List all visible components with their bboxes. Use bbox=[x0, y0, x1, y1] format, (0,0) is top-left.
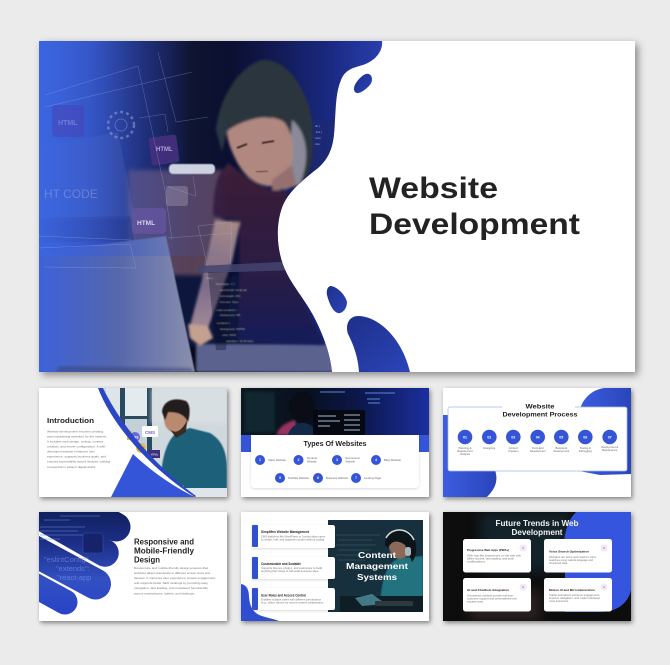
card: progressive web apps: Progressive Web Apps (PWAs) bbox=[467, 548, 509, 552]
dark photo backdrop bbox=[470, 512, 570, 621]
card: motion ui: improve navigation, and make interfaces bbox=[549, 596, 601, 600]
title: Website bbox=[369, 172, 498, 205]
card: voice search optimization: 2 bbox=[603, 546, 605, 550]
hero photo: developer at laptop: div { bbox=[315, 124, 320, 128]
body text: it essential in today's digital world. bbox=[47, 465, 96, 469]
blue blob top right bbox=[579, 388, 631, 475]
body text: It includes web design, coding, content bbox=[47, 440, 103, 444]
code overlay panel: color: #444; bbox=[222, 333, 237, 337]
white card: 5 bbox=[279, 476, 281, 480]
code overlay panel: line-height: 1.7; bbox=[216, 282, 235, 286]
process card bbox=[448, 404, 627, 471]
card: user roles and access control: Enables multiple users with different permissions bbox=[261, 598, 322, 602]
card: motion ui: more interactive. bbox=[549, 599, 569, 603]
card: voice search optimization bbox=[544, 539, 612, 572]
card: voice search optimization: searches using natural language and bbox=[549, 558, 594, 562]
heading: Design bbox=[134, 555, 160, 564]
body text: ensures accessibility across devices, making bbox=[47, 460, 110, 464]
title bbox=[369, 172, 580, 241]
heading bbox=[496, 519, 579, 537]
code overlay panel: background: #fff; bbox=[220, 313, 241, 317]
tech badges: HTML bbox=[151, 452, 159, 456]
floating HTML badges: HTML bbox=[137, 220, 155, 227]
card: progressive web apps: notifications. bbox=[467, 560, 486, 564]
card: customizable and scalable: Supports themes, plugins, and extensions to build bbox=[261, 566, 323, 570]
floating HTML badges: HTML bbox=[58, 120, 78, 127]
process card: Front-End bbox=[532, 446, 544, 450]
code overlay panel: font-size: 16px; bbox=[220, 300, 239, 304]
card: motion ui: Subtle animations enhance engagement, bbox=[549, 593, 600, 597]
body text: across smartphones, tablets, and desktops. bbox=[134, 592, 195, 596]
process card: Requirement bbox=[457, 449, 473, 453]
heading: Future Trends in Web bbox=[496, 519, 579, 528]
process card: Back-End bbox=[555, 446, 568, 450]
heading: Types Of Websites bbox=[304, 441, 367, 448]
panel: introduction slide bbox=[39, 388, 227, 497]
hero photo: developer at laptop: .font { bbox=[315, 130, 322, 134]
process card: Debugging bbox=[579, 449, 592, 453]
floating HTML badges bbox=[52, 105, 180, 234]
process card: Testing & bbox=[580, 446, 591, 450]
card: ai and chatbots: AI and Chatbots Integration bbox=[467, 588, 509, 592]
code overlay panel: font-weight: 300; bbox=[220, 294, 241, 298]
heading: Mobile-Friendly bbox=[134, 546, 195, 555]
diagonal code-photo stripes: "eslintConfig" bbox=[44, 555, 89, 564]
process card: 02 bbox=[487, 436, 491, 440]
card: customizable and scalable bbox=[252, 557, 335, 579]
card: ai and chatbots: 3 bbox=[522, 585, 524, 589]
heading: Introduction bbox=[47, 416, 94, 425]
card: progressive web apps: Offer app-like experiences on the web with bbox=[467, 554, 522, 558]
white card: Website bbox=[346, 460, 356, 464]
gear icon bbox=[108, 112, 134, 138]
code overlay panel: background: #f4f4f4; bbox=[220, 327, 246, 331]
blob accent top bbox=[354, 74, 372, 93]
card: user roles and access control: (e.g., editor, admin) for secure content collaboration. bbox=[261, 600, 324, 604]
blob accent middle bbox=[327, 286, 347, 313]
tech badges bbox=[127, 426, 160, 458]
hero photo: developer at laptop: color; bbox=[315, 136, 322, 140]
panel: content management systems slide bbox=[241, 512, 429, 621]
body text: devices. It improves user experience, boosts engagement, bbox=[134, 576, 216, 580]
blob accent bottom bbox=[347, 316, 410, 372]
photo: smiling developer bbox=[98, 388, 227, 497]
floating HTML badges: HTML bbox=[156, 147, 173, 153]
white card: Portfolio Website bbox=[288, 476, 310, 480]
body text: and maintaining websites for the internet. bbox=[47, 434, 107, 438]
process card: Development bbox=[530, 449, 546, 453]
photo title: Systems bbox=[357, 572, 397, 582]
process card: Deployment & bbox=[601, 445, 618, 449]
card: ai and chatbots: AI-powered chatbots provide real-time bbox=[467, 594, 514, 598]
process card: Development bbox=[553, 449, 569, 453]
white card: Blog Website bbox=[384, 458, 402, 462]
white card bbox=[251, 435, 419, 488]
white card: Landing Page bbox=[364, 476, 382, 480]
code overlay panel: .container { bbox=[216, 321, 230, 325]
heading: Website bbox=[526, 404, 555, 410]
panel: future trends slide bbox=[443, 512, 631, 621]
body text: websites adapt seamlessly to different screen sizes and bbox=[134, 571, 210, 575]
diagonal code-photo stripes bbox=[39, 512, 130, 614]
translucent browser window bbox=[110, 132, 133, 218]
card: progressive web apps: 1 bbox=[522, 546, 524, 550]
code overlay panel bbox=[198, 262, 286, 350]
card: simplifies website management: to create, edit, and organize content without coding. bbox=[261, 538, 325, 542]
code overlay panel: .box { bbox=[206, 276, 213, 280]
blue blob bottom left bbox=[443, 415, 496, 497]
photo: developer at monitor bbox=[241, 388, 429, 435]
panel: development process slide bbox=[443, 388, 631, 497]
heading: Development bbox=[512, 528, 563, 537]
card: ai and chatbots: customer support and personalized user bbox=[467, 596, 517, 600]
process card: 06 bbox=[583, 436, 587, 440]
card: simplifies website management bbox=[252, 525, 335, 548]
card: simplifies website management: CMS platforms like WordPress or Joomla allow users bbox=[261, 534, 326, 538]
card: customizable and scalable: anything from blogs to full-scale business sites. bbox=[261, 569, 319, 573]
heading: Development Process bbox=[502, 412, 578, 418]
hero photo: developer at laptop: size; bbox=[315, 142, 321, 146]
search tile bbox=[166, 186, 188, 206]
white card: Static Website bbox=[268, 458, 287, 462]
photo: woman with headphones bbox=[328, 520, 423, 612]
process card: Creation bbox=[508, 449, 519, 453]
circuit lines bbox=[39, 52, 233, 276]
white card: Website bbox=[307, 460, 317, 464]
white card: 4 bbox=[375, 458, 377, 462]
laptop bbox=[39, 236, 195, 372]
body text: developed website enhances user bbox=[47, 450, 95, 454]
card: simplifies website management: Simplifies Website Management bbox=[261, 530, 310, 534]
white card: Business Website bbox=[326, 476, 349, 480]
hero photo: developer at laptop bbox=[39, 41, 384, 372]
white card: 2 bbox=[298, 458, 300, 462]
process card: Designing bbox=[483, 446, 496, 450]
process card: 05 bbox=[559, 436, 563, 440]
body text: Responsive and mobile-friendly design ensures that bbox=[134, 566, 208, 570]
code overlay panel: transition: .3s all ease; bbox=[226, 339, 254, 343]
panel: hero slide bbox=[39, 41, 635, 372]
heading bbox=[502, 404, 578, 418]
process card: 01 bbox=[463, 436, 467, 440]
heading: Responsive and bbox=[134, 537, 194, 546]
card: progressive web apps bbox=[463, 539, 531, 572]
white card: Ecommerce bbox=[346, 456, 360, 460]
blue corner blob bbox=[241, 584, 279, 621]
card: progressive web apps: offline access, fast loading, and push bbox=[467, 556, 515, 560]
white card: 3 bbox=[336, 458, 338, 462]
body text: Website development involves creating bbox=[47, 430, 103, 434]
body text: experience, supports business goals, and bbox=[47, 454, 106, 458]
photo title: Content bbox=[358, 550, 396, 560]
body text: and supports better SEO rankings by providing easy bbox=[134, 581, 209, 585]
numbered items bbox=[255, 455, 381, 483]
card: motion ui bbox=[544, 578, 612, 612]
blue triangle bbox=[111, 454, 195, 497]
diagonal code-photo stripes: "extends": bbox=[56, 564, 90, 573]
process card: Planning & bbox=[458, 446, 472, 450]
blue blob bbox=[564, 512, 631, 612]
card: voice search optimization: structured data. bbox=[549, 561, 568, 565]
card: voice search optimization: Websites are being optimized for voice bbox=[549, 555, 597, 559]
woman bbox=[188, 60, 325, 346]
process card: 04 bbox=[536, 436, 540, 440]
code overlay panel: .main-container { bbox=[216, 308, 237, 312]
white card: 6 bbox=[317, 476, 319, 480]
numbered steps bbox=[458, 430, 617, 444]
card: ai and chatbots: experiences. bbox=[467, 600, 484, 604]
photo title: Management bbox=[346, 561, 408, 571]
tech badges: CSS bbox=[132, 436, 139, 440]
process card: 03 bbox=[511, 436, 515, 440]
body text bbox=[134, 566, 216, 596]
card: voice search optimization: Voice Search Optimization bbox=[549, 550, 589, 554]
title: Development bbox=[369, 208, 580, 241]
process card: Content bbox=[509, 446, 518, 450]
heading bbox=[134, 537, 195, 564]
blue band bbox=[241, 435, 429, 452]
card: motion ui: Motion UI and Microinteractions bbox=[549, 588, 595, 592]
desk lamp bbox=[169, 164, 215, 174]
white card: 1 bbox=[259, 458, 261, 462]
photo title bbox=[346, 550, 408, 582]
white card: 7 bbox=[355, 476, 357, 480]
tech badges: CMS bbox=[145, 430, 155, 435]
body text: creation, and server configuration. A well- bbox=[47, 444, 106, 448]
screen code text: HT CODE bbox=[44, 187, 98, 201]
panel: types of websites slide bbox=[241, 388, 429, 497]
diagonal code-photo stripes: "react-app bbox=[57, 573, 91, 582]
code overlay panel: word-break: break-all; bbox=[220, 288, 247, 292]
process card: Analysis bbox=[460, 452, 471, 456]
curved blue band bbox=[98, 388, 196, 497]
panel: responsive design slide bbox=[38, 511, 232, 626]
card: user roles and access control: User Roles and Access Control bbox=[261, 594, 306, 598]
process card: Maintenance bbox=[602, 448, 618, 452]
card: ai and chatbots bbox=[463, 578, 531, 612]
card: user roles and access control bbox=[252, 588, 335, 610]
white card: Dynamic bbox=[307, 456, 318, 460]
process card: 07 bbox=[608, 436, 612, 440]
body text: navigation, fast loading, and consistent functionality bbox=[134, 586, 209, 590]
tech badges: PHP bbox=[138, 446, 144, 450]
body text bbox=[47, 430, 110, 469]
card: customizable and scalable: Customizable and Scalable bbox=[261, 562, 301, 566]
card: motion ui: 4 bbox=[603, 585, 605, 589]
